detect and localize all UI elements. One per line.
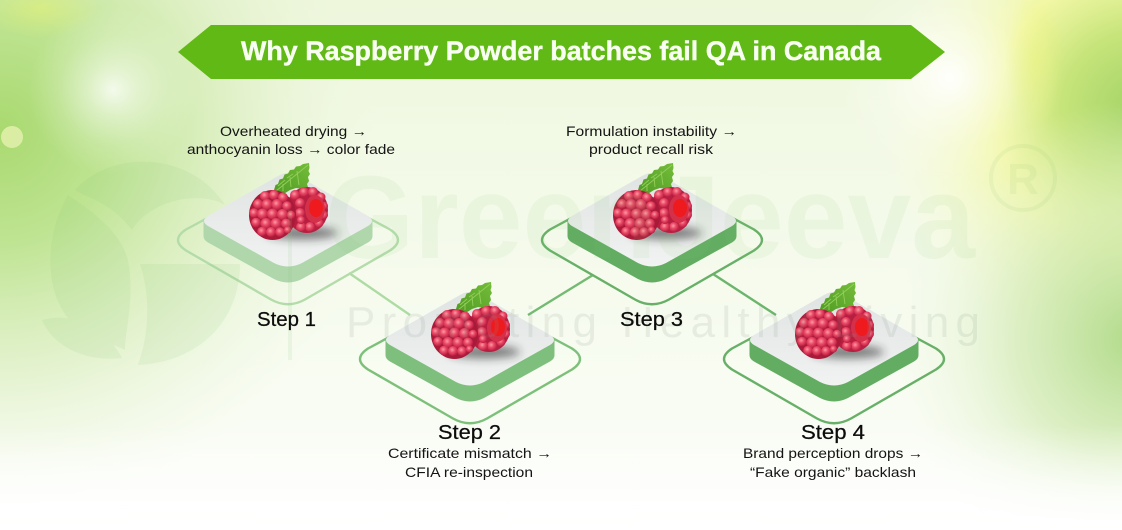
icon: watermark leaf mark xyxy=(42,162,240,365)
step 2 label: Step 2 xyxy=(438,421,501,444)
node: step 2 platform xyxy=(360,282,580,423)
icon: raspberries step 4 xyxy=(795,282,884,359)
icon: raspberries step 2 xyxy=(431,282,520,359)
caption: step 2: Certificate mismatch → xyxy=(388,445,552,461)
step 1 label: Step 1 xyxy=(257,308,316,331)
title banner xyxy=(178,25,945,79)
step 4 label: Step 4 xyxy=(801,421,865,444)
caption: step 3 xyxy=(566,123,737,157)
caption: step 1: anthocyanin loss → color fade xyxy=(187,141,395,157)
caption: step 2: CFIA re-inspection xyxy=(405,464,533,480)
caption: step 3: Formulation instability → xyxy=(566,123,737,139)
watermark registered mark xyxy=(991,146,1055,210)
watermark logo xyxy=(42,146,1055,365)
connector: step 3 to step 4 xyxy=(713,274,776,315)
connector: step 2 to step 3 xyxy=(528,275,593,315)
node: step 1 platform xyxy=(178,163,398,304)
watermark name: GreenJeeva xyxy=(325,152,976,284)
icon: raspberries step 1 xyxy=(249,163,338,240)
title: Why Raspberry Powder batches fail QA in Canada xyxy=(241,36,882,66)
caption: step 4: “Fake organic” backlash xyxy=(750,464,916,480)
node: step 3 platform xyxy=(542,163,762,304)
watermark registered mark: R xyxy=(1007,155,1039,204)
watermark tagline: Promoting Healthy Living xyxy=(346,298,980,347)
caption: step 4: Brand perception drops → xyxy=(743,445,923,461)
caption: step 1: Overheated drying → xyxy=(220,123,367,139)
caption: step 4 xyxy=(743,445,923,480)
caption: step 3: product recall risk xyxy=(589,141,714,157)
icon: raspberries step 3 xyxy=(613,163,702,240)
step 3 label: Step 3 xyxy=(620,308,683,331)
connector: step 1 to step 2 xyxy=(349,273,410,315)
node: step 4 platform xyxy=(724,282,944,423)
caption: step 2 xyxy=(388,445,552,480)
caption: step 1 xyxy=(187,123,395,157)
